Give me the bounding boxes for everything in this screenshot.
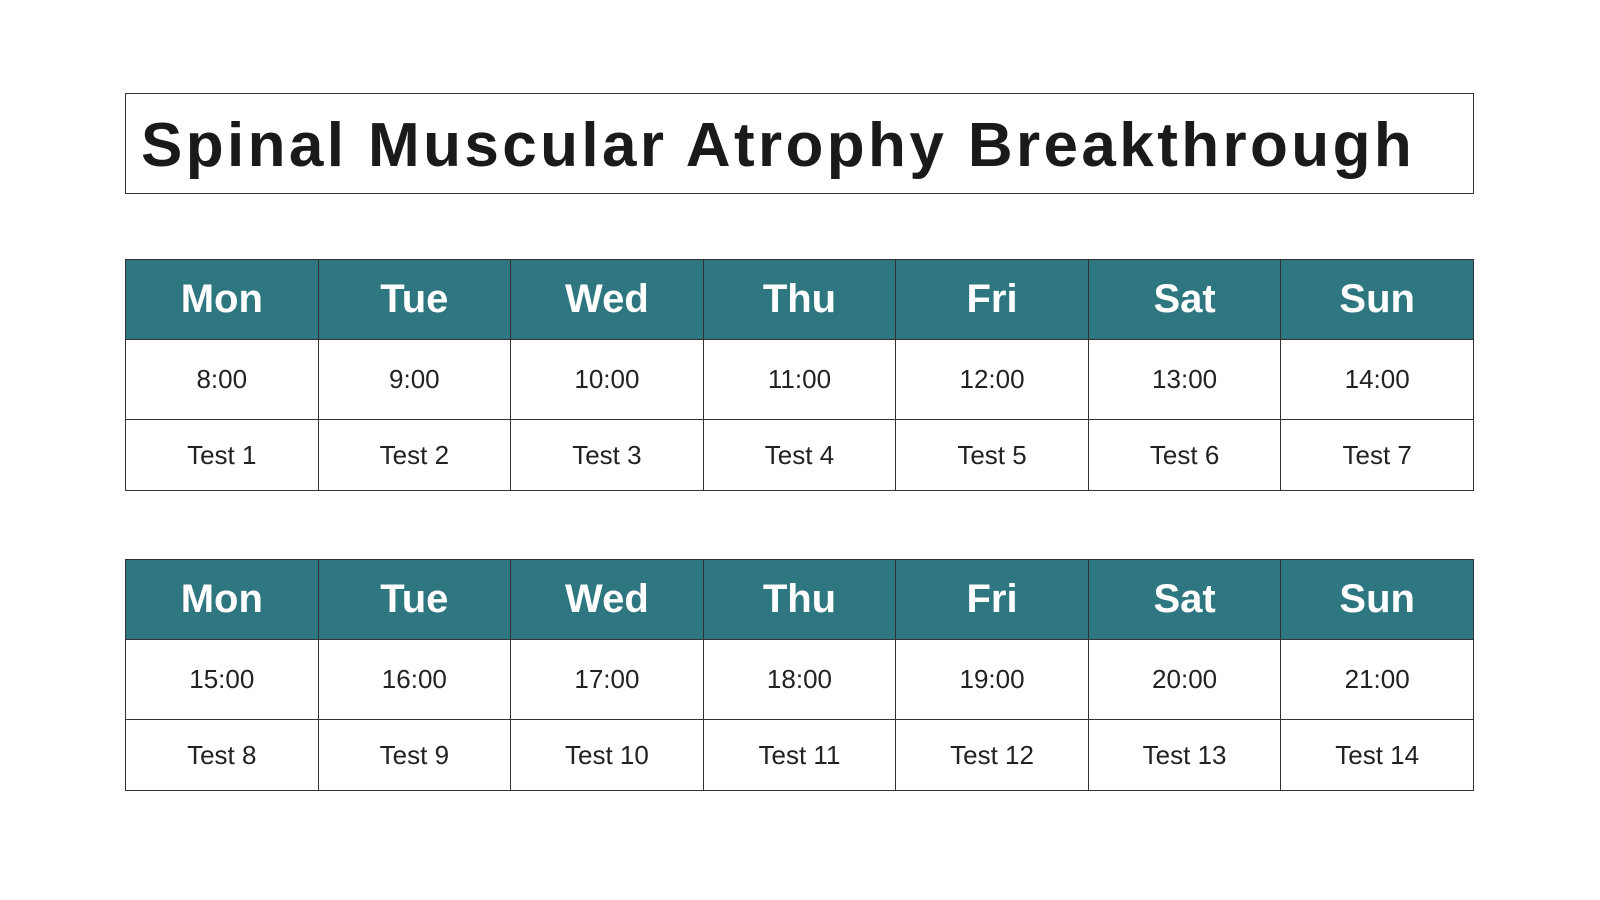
- table: week 1 schedule: Test 4: [765, 440, 834, 470]
- table: week 1 schedule: Test 1: [187, 440, 256, 470]
- table: week 1 schedule: Fri: [966, 277, 1018, 321]
- table: week 1 schedule: 14:00: [1345, 364, 1410, 394]
- table: week 2 schedule: Sat: [1153, 577, 1216, 621]
- table: week 2 schedule: Test 12: [950, 740, 1034, 770]
- table: week 1 schedule: Mon: [181, 277, 263, 321]
- title: Spinal Muscular Atrophy Breakthrough: [141, 111, 1415, 180]
- table: week 2 schedule: Fri: [966, 577, 1018, 621]
- table: week 2 schedule: Test 10: [565, 740, 649, 770]
- table: week 2 schedule: Test 8: [187, 740, 256, 770]
- table: week 1 schedule: Test 6: [1150, 440, 1219, 470]
- table: week 2 schedule: 18:00: [767, 664, 832, 694]
- table: week 2 schedule: 15:00: [189, 664, 254, 694]
- table: week 2 schedule: Mon: [181, 577, 263, 621]
- table: week 1 schedule: 12:00: [959, 364, 1025, 394]
- table: week 2 schedule: 17:00: [574, 664, 639, 694]
- table: week 1 schedule: Test 7: [1342, 440, 1412, 470]
- table: week 2 schedule: Test 9: [380, 740, 449, 770]
- table: week 1 schedule: Test 2: [380, 440, 449, 470]
- table: week 1 schedule: [125, 259, 1474, 491]
- table: week 1 schedule: 8:00: [196, 364, 247, 394]
- table: week 2 schedule: 19:00: [959, 664, 1025, 694]
- table: week 1 schedule: Test 3: [572, 440, 642, 470]
- table: week 2 schedule: Wed: [565, 577, 649, 621]
- table: week 2 schedule: [125, 559, 1474, 791]
- table: week 1 schedule: Wed: [565, 277, 649, 321]
- table: week 2 schedule: 21:00: [1345, 664, 1410, 694]
- table: week 2 schedule: Sun: [1339, 577, 1415, 621]
- table: week 2 schedule: Thu: [763, 577, 836, 621]
- table: week 1 schedule: Sat: [1153, 277, 1216, 321]
- table: week 1 schedule: 9:00: [389, 364, 440, 394]
- title: [125, 93, 1474, 194]
- table: week 2 schedule: Test 11: [759, 740, 840, 770]
- table: week 2 schedule: 16:00: [382, 664, 447, 694]
- table: week 1 schedule: Thu: [763, 277, 836, 321]
- table: week 2 schedule: 20:00: [1152, 664, 1217, 694]
- table: week 1 schedule: Sun: [1339, 277, 1415, 321]
- table: week 2 schedule: Test 13: [1143, 740, 1226, 770]
- table: week 1 schedule: Tue: [380, 277, 448, 321]
- table: week 1 schedule: 13:00: [1152, 364, 1217, 394]
- table: week 1 schedule: 11:00: [768, 364, 831, 394]
- table: week 1 schedule: Test 5: [957, 440, 1027, 470]
- table: week 2 schedule: Test 14: [1335, 740, 1419, 770]
- table: week 2 schedule: Tue: [380, 577, 448, 621]
- table: week 1 schedule: 10:00: [574, 364, 639, 394]
